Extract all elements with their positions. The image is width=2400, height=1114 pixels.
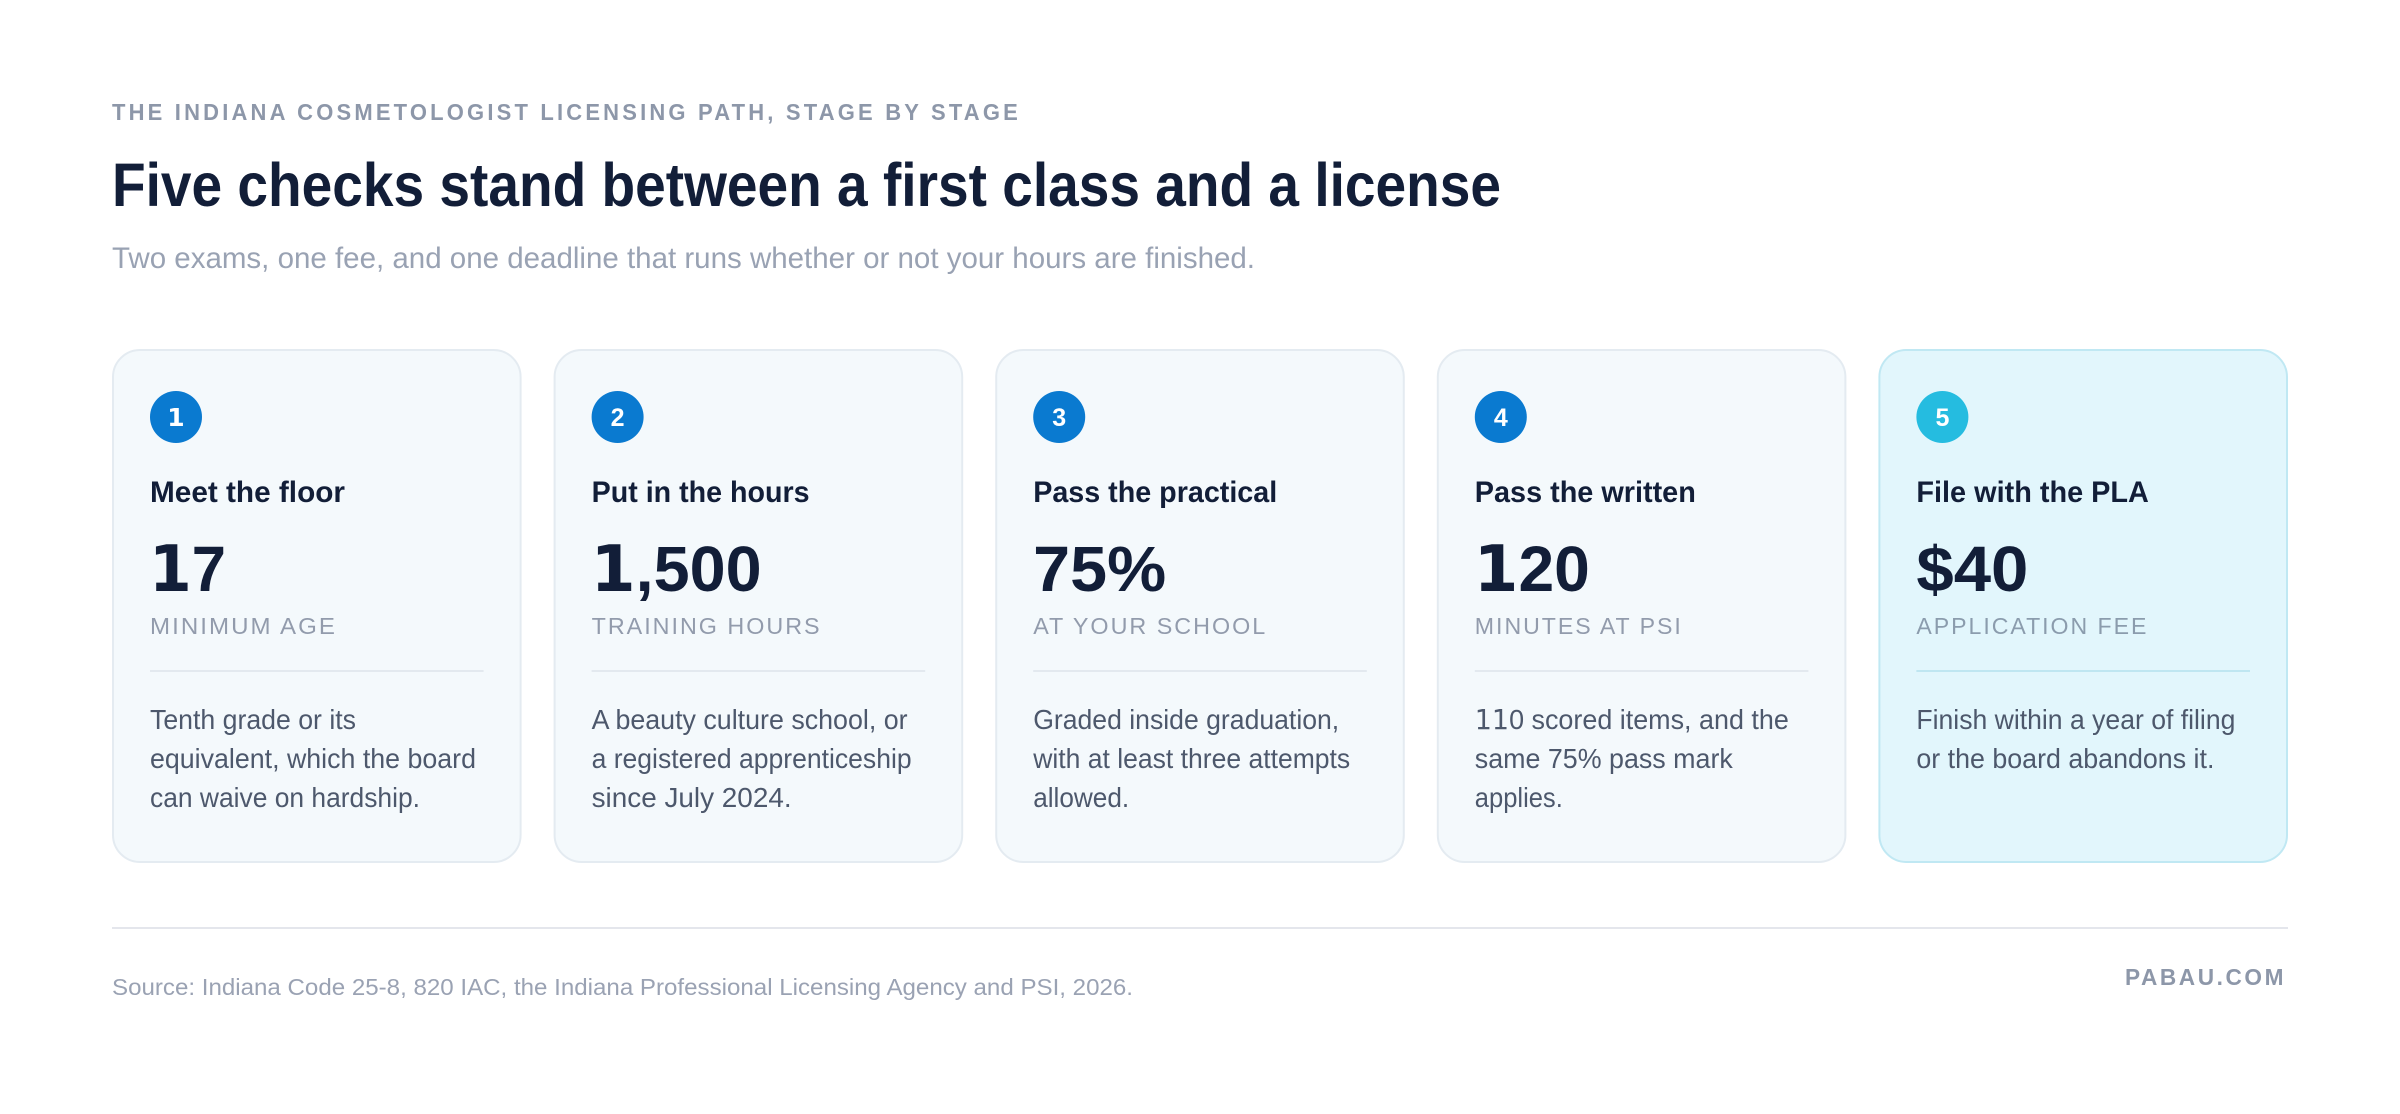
step heading: Meet the floor bbox=[150, 476, 346, 509]
step number badge 2: 2 bbox=[611, 404, 625, 432]
description bbox=[150, 704, 476, 813]
step heading: Put in the hours bbox=[592, 476, 810, 509]
subtitle: Two exams, one fee, and one deadline that runs whether or not your hours are finished. bbox=[112, 242, 1255, 275]
step heading: File with the PLA bbox=[1916, 476, 2149, 509]
step number badge 4 bbox=[1475, 391, 1527, 443]
step number badge 4: 4 bbox=[1494, 404, 1508, 432]
description: applies. bbox=[1475, 782, 1563, 813]
description bbox=[592, 704, 912, 813]
description: Finish within a year of filing bbox=[1916, 704, 2235, 735]
panel: step 4 pass the written bbox=[1438, 350, 1845, 862]
big number: 120 bbox=[1474, 533, 1590, 607]
description: 110 scored items, and the bbox=[1475, 703, 1789, 736]
step number badge 5 bbox=[1916, 391, 1968, 443]
metric label: TRAINING HOURS bbox=[592, 613, 822, 639]
description: equivalent, which the board bbox=[150, 743, 476, 774]
panel: step 5 file with the PLA bbox=[1879, 350, 2287, 862]
metric label: AT YOUR SCHOOL bbox=[1033, 613, 1267, 639]
panel: step 3 pass the practical bbox=[996, 350, 1404, 862]
description bbox=[1916, 704, 2235, 774]
step number badge 3 bbox=[1033, 391, 1085, 443]
big number: $40 bbox=[1916, 533, 2028, 605]
metric label: APPLICATION FEE bbox=[1916, 613, 2148, 639]
description bbox=[1032, 704, 1350, 813]
step number badge 1 bbox=[150, 391, 202, 443]
step number badge 3: 3 bbox=[1052, 404, 1066, 432]
description: or the board abandons it. bbox=[1916, 743, 2214, 774]
description: Graded inside graduation, bbox=[1033, 704, 1339, 735]
description: Tenth grade or its bbox=[150, 704, 356, 735]
metric label: MINIMUM AGE bbox=[150, 613, 337, 639]
big number: 1,500 bbox=[591, 533, 762, 607]
big number: 75% bbox=[1033, 533, 1166, 605]
description: with at least three attempts bbox=[1032, 743, 1350, 774]
title: Five checks stand between a first class and a license bbox=[112, 151, 1501, 219]
description: same 75% pass mark bbox=[1475, 743, 1734, 774]
description: allowed. bbox=[1033, 782, 1129, 813]
step number badge 2 bbox=[592, 391, 644, 443]
brand: PABAU.COM bbox=[2125, 964, 2286, 990]
description: A beauty culture school, or bbox=[592, 704, 908, 735]
description: can waive on hardship. bbox=[150, 782, 420, 813]
panel: step 1 meet the floor bbox=[113, 350, 521, 862]
description: since July 2024. bbox=[592, 782, 792, 813]
metric label: MINUTES AT PSI bbox=[1475, 613, 1683, 639]
step number badge 5: 5 bbox=[1935, 404, 1949, 432]
source note: Source: Indiana Code 25-8, 820 IAC, the Indiana Professional Licensing Agency and PSI, 2026. bbox=[112, 974, 1133, 1000]
step number badge 1: 1 bbox=[167, 403, 185, 432]
description: a registered apprenticeship bbox=[592, 743, 912, 774]
eyebrow heading: THE INDIANA COSMETOLOGIST LICENSING PATH, STAGE BY STAGE bbox=[112, 99, 1021, 125]
panel: step 2 put in the hours bbox=[555, 350, 962, 862]
step heading: Pass the written bbox=[1475, 476, 1696, 509]
step heading: Pass the practical bbox=[1033, 476, 1277, 509]
description bbox=[1475, 703, 1789, 813]
big number: 17 bbox=[149, 533, 226, 607]
